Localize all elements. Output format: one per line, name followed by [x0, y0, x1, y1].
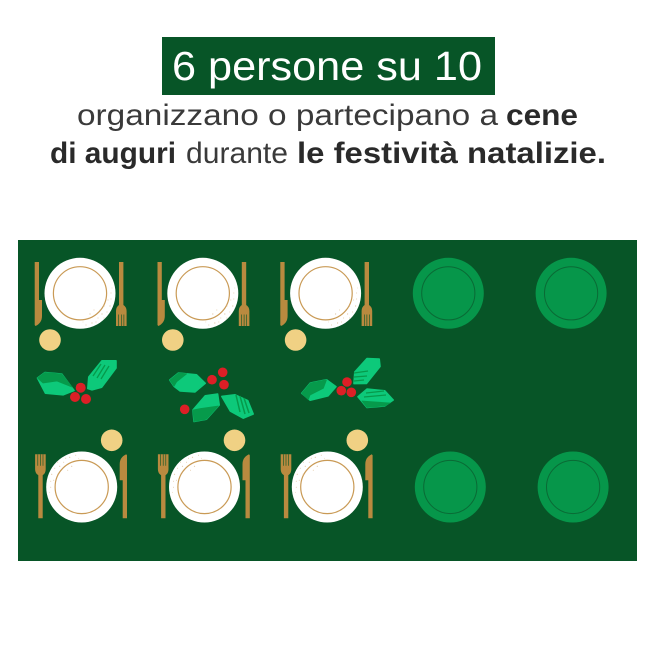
- holly 3: [302, 358, 393, 408]
- place setting: bottom 2: [158, 429, 250, 522]
- panel: table: [18, 240, 637, 561]
- subtitle text: organizzano o partecipano a: [77, 99, 498, 132]
- holly 2: [170, 368, 253, 422]
- place setting: top 2: [158, 258, 249, 351]
- place setting: top 3: [280, 258, 372, 351]
- empty plate: top 4: [413, 258, 484, 329]
- place setting: bottom 1: [35, 429, 127, 522]
- empty plate: bottom 4: [415, 452, 486, 522]
- subtitle text: di auguri: [50, 137, 176, 170]
- subtitle text: durante: [186, 137, 288, 170]
- holly 1: [38, 361, 116, 404]
- empty plate: top 5: [536, 258, 607, 329]
- subtitle text: [50, 99, 606, 170]
- place setting: top 1: [35, 258, 127, 351]
- subtitle text: cene: [506, 99, 578, 132]
- subtitle text: le festività natalizie.: [297, 137, 606, 170]
- empty plate: bottom 5: [538, 452, 609, 522]
- heading text: 6 persone su 10: [172, 43, 482, 89]
- place setting: bottom 3: [281, 429, 373, 522]
- heading banner: [162, 37, 495, 95]
